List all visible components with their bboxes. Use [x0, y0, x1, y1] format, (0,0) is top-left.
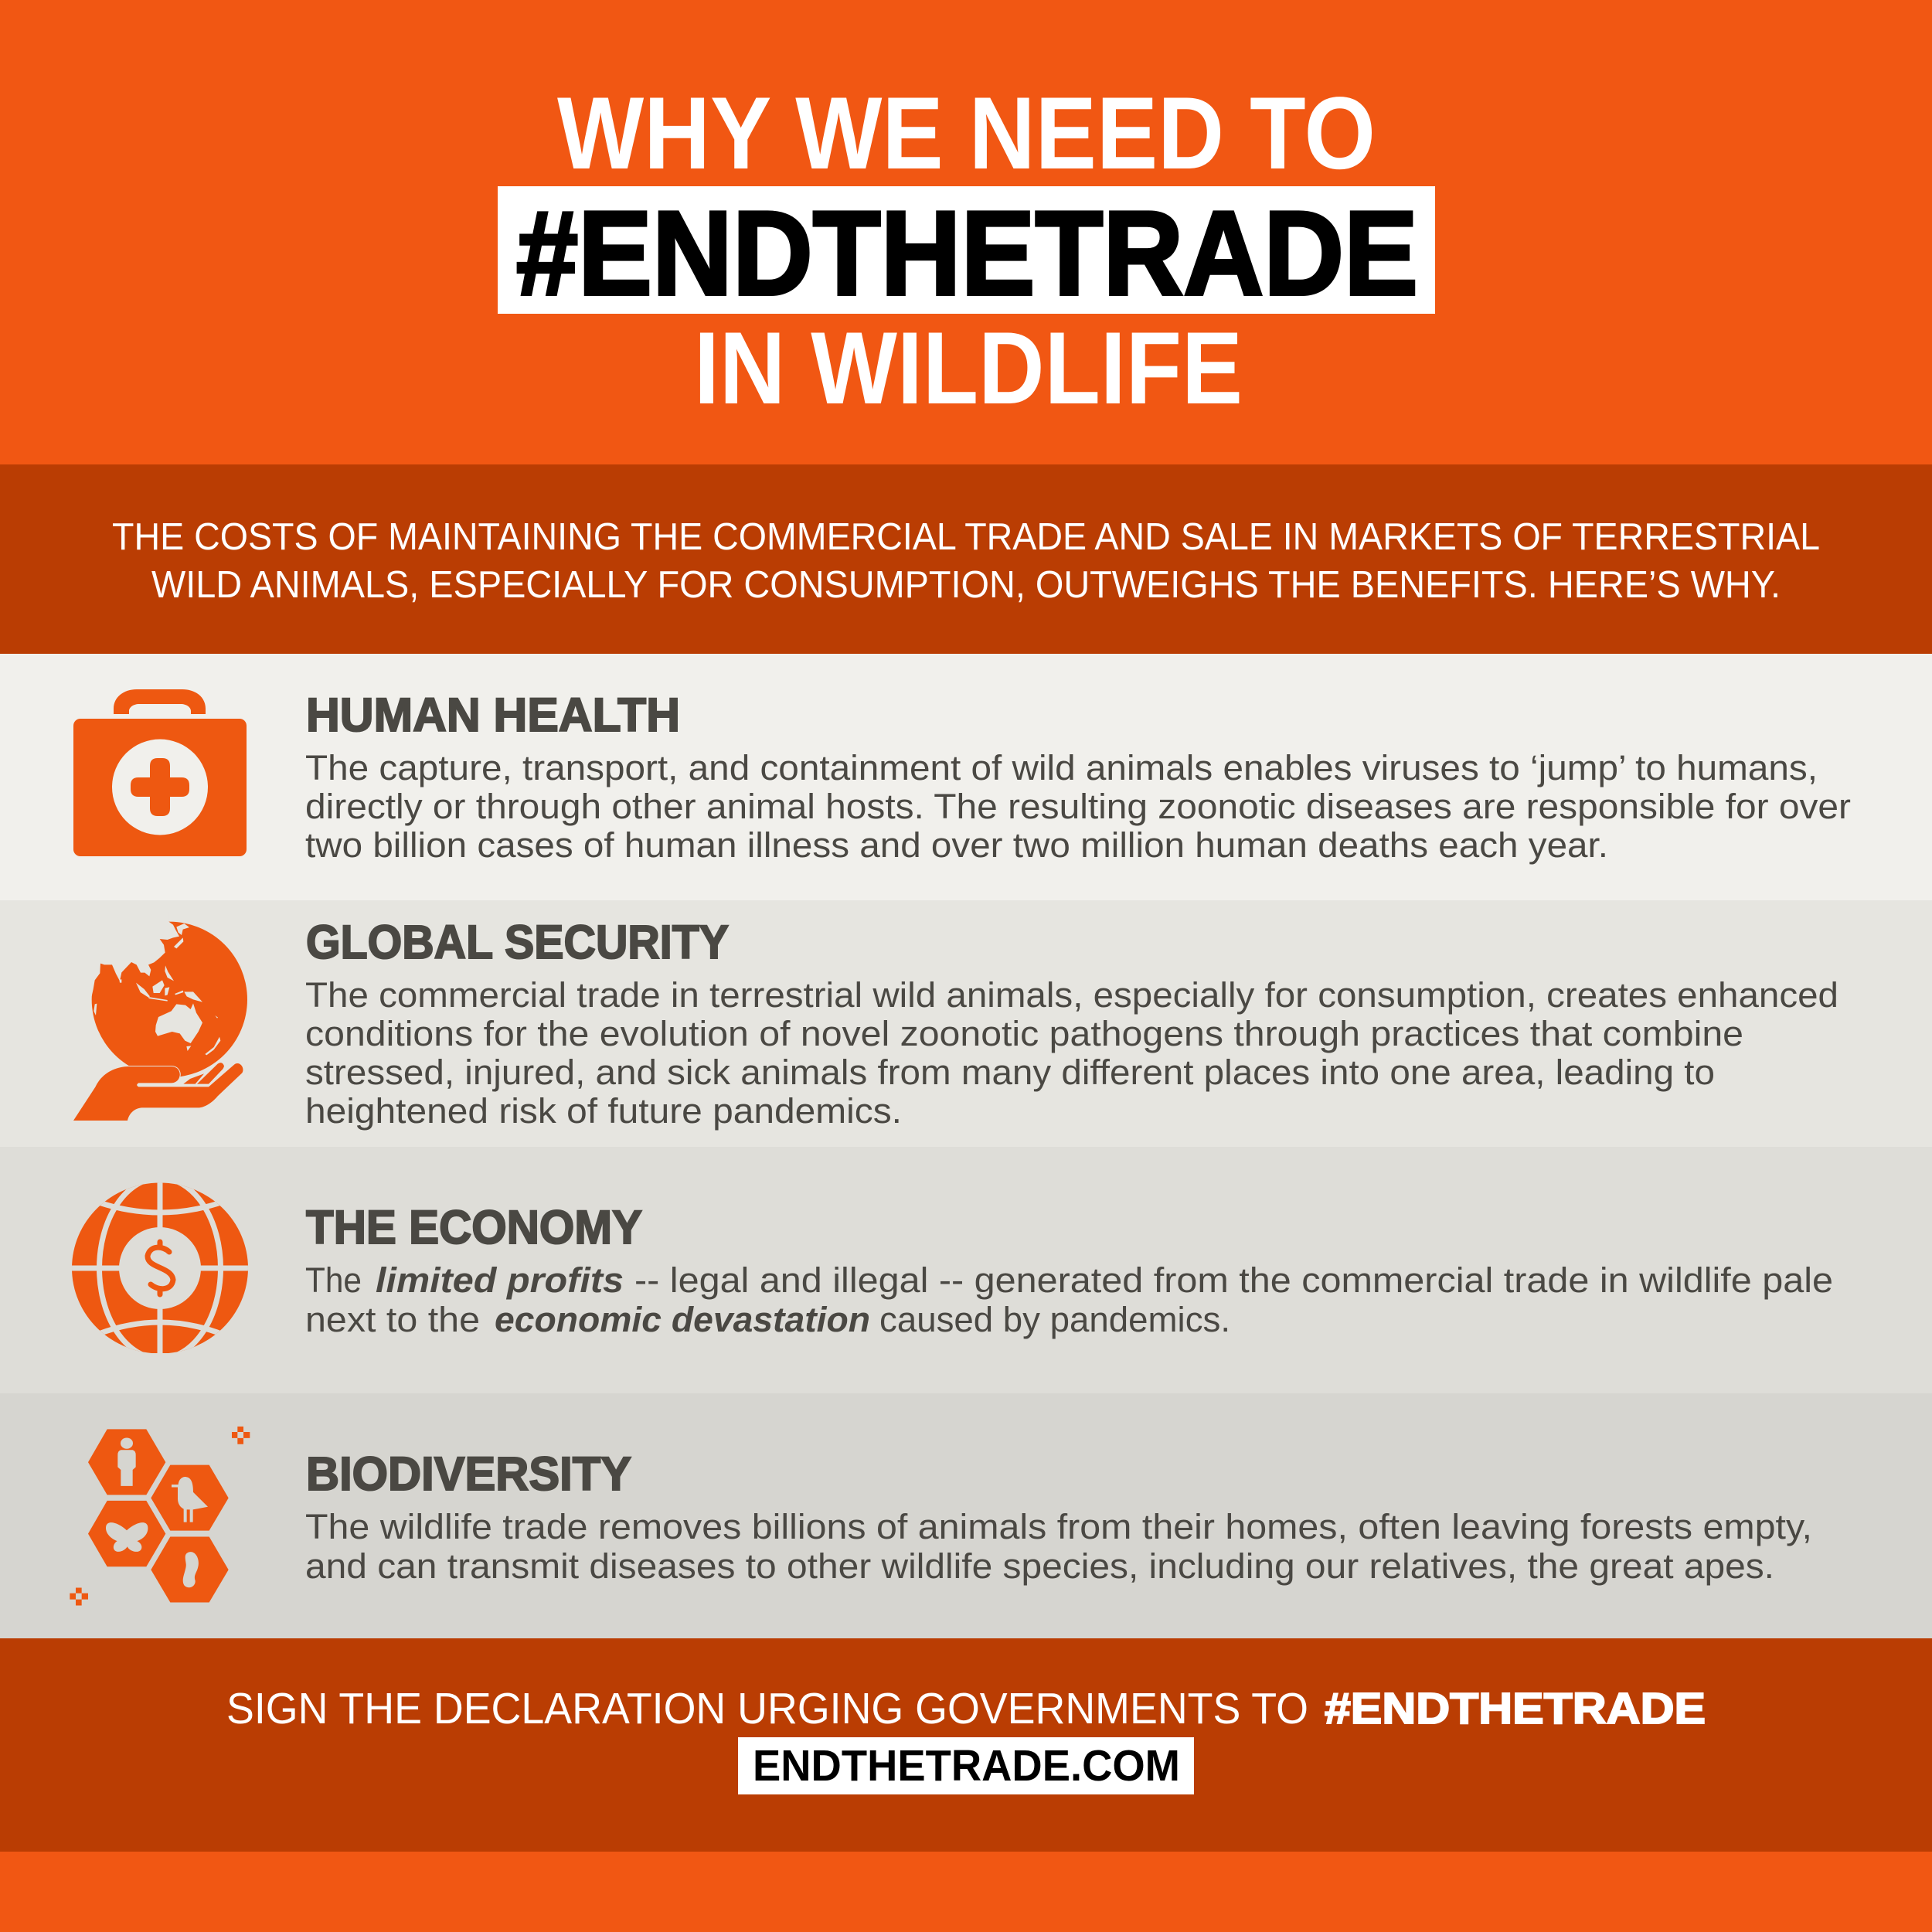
body text: the economy: The: [305, 1260, 362, 1300]
panel: intro statement: WILD ANIMALS, ESPECIALLY FOR CONSUMPTION, OUTWEIGHS THE BENEFITS. HERE’S WHY.: [151, 563, 1781, 606]
body text: the economy: caused by pandemics.: [879, 1300, 1230, 1339]
body text: human health: two billion cases of human illness and over two million human deaths each year.: [305, 825, 1608, 865]
body text: biodiversity: [305, 1507, 1812, 1586]
title block: [498, 77, 1435, 426]
panel: intro statement: THE COSTS OF MAINTAINING THE COMMERCIAL TRADE AND SALE IN MARKETS OF TERRESTRIAL: [112, 515, 1820, 558]
body text: biodiversity: The wildlife trade removes billions of animals from their homes, often leaving forests empty,: [305, 1507, 1812, 1546]
body text: human health: The capture, transport, and containment of wild animals enables viruses to ‘jump’ to humans,: [305, 748, 1818, 787]
website badge: ENDTHETRADE.COM: [753, 1741, 1180, 1791]
hashtag in call to action: #ENDTHETRADE: [1325, 1684, 1706, 1733]
heading: biodiversity: BIODIVERSITY: [306, 1447, 631, 1500]
body text: global security: [305, 975, 1838, 1131]
heading: human health: HUMAN HEALTH: [306, 689, 680, 741]
icon: globe with dollar: [72, 1182, 248, 1353]
panel: the economy: [0, 1147, 1932, 1393]
body text: human health: [305, 748, 1851, 865]
body text: the economy: -- legal and illegal -- generated from the commercial trade in wildlife pale: [634, 1260, 1833, 1300]
icon: globe in hand: [73, 912, 247, 1121]
body text: the economy: limited profits: [376, 1260, 624, 1300]
icon: first aid kit: [73, 689, 247, 856]
body text: global security: heightened risk of future pandemics.: [305, 1091, 902, 1131]
body text: the economy: next to the: [305, 1300, 480, 1339]
panel: call to action: [0, 1638, 1932, 1852]
hashtag banner: #ENDTHETRADE: [516, 186, 1418, 320]
body text: global security: The commercial trade in terrestrial wild animals, especially for consumption, creates enhanced: [305, 975, 1838, 1015]
body text: the economy: economic devastation: [495, 1300, 870, 1339]
panel: intro statement: [0, 464, 1932, 654]
icon: species hexagons: [70, 1427, 250, 1605]
heading: the economy: THE ECONOMY: [306, 1201, 642, 1253]
panel: global security: [0, 900, 1932, 1147]
body text: biodiversity: and can transmit diseases to other wildlife species, including our relatives, the great apes.: [305, 1546, 1774, 1586]
body text: human health: directly or through other animal hosts. The resulting zoonotic diseases are responsible for over: [305, 787, 1851, 826]
heading: global security: GLOBAL SECURITY: [306, 916, 729, 968]
title line: why we need to: WHY WE NEED TO: [557, 77, 1376, 191]
title line: in wildlife: IN WILDLIFE: [694, 311, 1243, 426]
panel: human health: [0, 654, 1932, 900]
body text: the economy: [305, 1260, 1833, 1339]
body text: global security: conditions for the evolution of novel zoonotic pathogens through practices that combine: [305, 1014, 1743, 1053]
call to action text: SIGN THE DECLARATION URGING GOVERNMENTS TO: [226, 1684, 1308, 1733]
panel: biodiversity: [0, 1393, 1932, 1638]
body text: global security: stressed, injured, and sick animals from many different places into one area, leading to: [305, 1053, 1715, 1092]
